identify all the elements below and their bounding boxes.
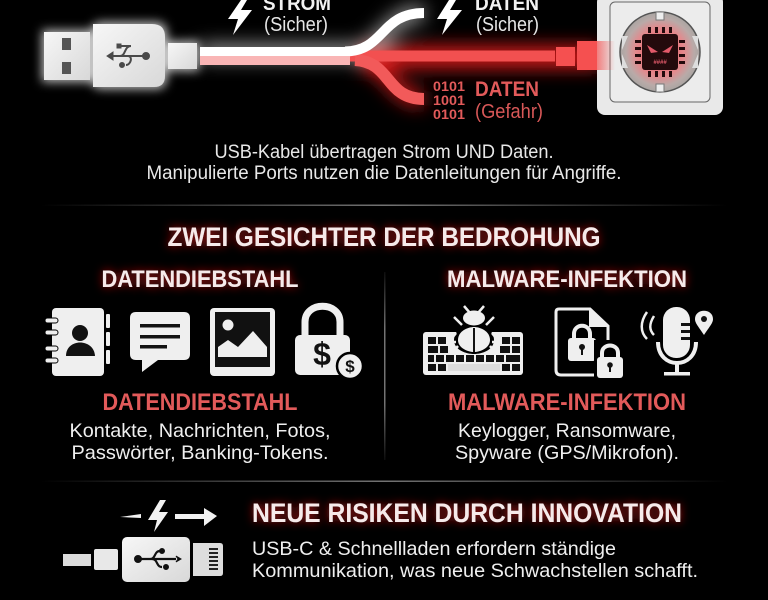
icon: USB plug (44, 24, 197, 87)
label: Daten sicher: (Sicher) (476, 14, 539, 36)
label: Strom: (Sicher) (264, 14, 328, 36)
description: Kommunikation, was neue Schwachstellen schafft. (252, 560, 698, 582)
panel: Malware-Infektion (423, 266, 713, 464)
icon: keyboard with bug (423, 306, 523, 375)
label: Daten Gefahr: (Gefahr) (475, 101, 543, 123)
icon: lightning bolt data (437, 0, 462, 35)
label: Strom (263, 0, 331, 36)
description: Spyware (GPS/Mikrofon). (455, 442, 679, 464)
icon: USB-C connector (63, 537, 223, 582)
icon: padlock with dollar coin: $ (313, 336, 331, 372)
icon: photo (210, 308, 275, 376)
heading: MALWARE-INFEKTION (447, 266, 687, 293)
description: Kontakte, Nachrichten, Fotos, (70, 420, 330, 442)
description (70, 420, 330, 464)
icon: wall socket with malicious chip: #### (653, 60, 667, 66)
white power branch (345, 13, 424, 52)
description: Passwörter, Banking-Tokens. (72, 442, 328, 464)
subheading: DATENDIEBSTAHL (102, 389, 298, 416)
binary digits: 1001 (433, 93, 466, 108)
icon: message bubble (130, 312, 190, 372)
section heading: ZWEI GESICHTER DER BEDROHUNG (168, 222, 600, 252)
description (252, 538, 698, 582)
label: Daten Gefahr (475, 78, 543, 123)
icon: locked document (556, 309, 626, 380)
panel: Datendiebstahl (45, 266, 363, 464)
binary digits: 0101 (433, 79, 466, 94)
icon: arrow and lightning (120, 500, 217, 532)
red connector blocks (556, 41, 615, 70)
cable glow (200, 13, 600, 99)
intro text: Manipulierte Ports nutzen die Datenleitungen für Angriffe. (146, 163, 622, 184)
icon: microphone with signal and location (642, 307, 713, 376)
binary digits: 0101 (433, 107, 466, 122)
intro text: USB-Kabel übertragen Strom UND Daten. (214, 142, 554, 163)
icon: contact book (45, 308, 110, 376)
intro text (146, 142, 622, 184)
red data line to the port (350, 50, 555, 62)
description: Keylogger, Ransomware, (458, 420, 676, 442)
heading: DATENDIEBSTAHL (102, 266, 298, 293)
panel: new risks (63, 498, 698, 582)
main cable (200, 47, 350, 65)
label: Daten sicher (475, 0, 539, 36)
heading: NEUE RISIKEN DURCH INNOVATION (252, 498, 682, 528)
binary digits (433, 79, 466, 122)
chip (642, 34, 678, 70)
icon: padlock with dollar coin: $ (345, 357, 355, 376)
plug glow (42, 22, 199, 89)
description: USB-C & Schnellladen erfordern ständige (252, 538, 616, 560)
icon: padlock with dollar coin (295, 306, 363, 379)
subheading: MALWARE-INFEKTION (448, 389, 686, 416)
label: Daten Gefahr: DATEN (475, 78, 539, 101)
diagram: USB cable splitting into power and data (42, 0, 723, 123)
red danger branch (355, 60, 424, 99)
icon: lightning bolt power (228, 0, 252, 35)
icon: USB symbol (107, 44, 150, 68)
icon: wall socket with malicious chip (597, 0, 723, 115)
description (455, 420, 679, 464)
